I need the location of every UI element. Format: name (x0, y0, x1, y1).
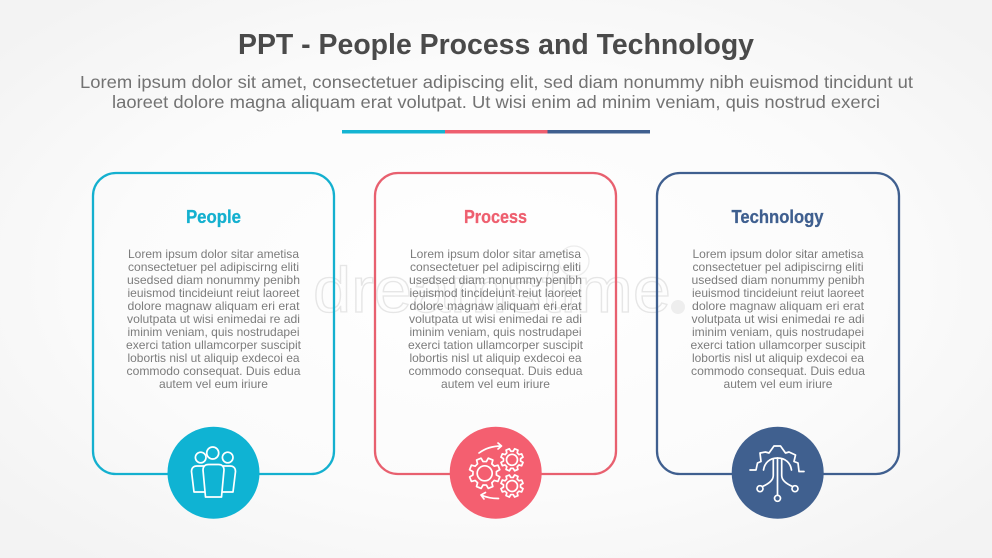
process body text: ieuismod tincideiunt reiut laoreet (410, 286, 582, 300)
people body text: volutpata ut wisi enimedai re adi (127, 312, 300, 326)
people body text: lobortis nisl ut aliquip exdecoi ea (128, 351, 300, 365)
process body text: consectetuer pel adipiscirng eliti (410, 260, 581, 274)
process body text: lobortis nisl ut aliquip exdecoi ea (410, 351, 582, 365)
subtitle text (80, 72, 913, 112)
technology body text: commodo consequat. Duis edua (691, 364, 865, 378)
technology body text: ieuismod tincideiunt reiut laoreet (692, 286, 865, 300)
people body text: ieuismod tincideiunt reiut laoreet (128, 286, 300, 300)
process body text: autem vel eum iriure (441, 377, 550, 391)
technology body text: Lorem ipsum dolor sitar ametisa (692, 247, 864, 261)
subtitle text: Lorem ipsum dolor sit amet, consectetuer adipiscing elit, sed diam nonummy nibh euismod tincidunt ut (80, 72, 913, 92)
process body text: exerci tation ullamcorper suscipit (408, 338, 584, 352)
people body text: exerci tation ullamcorper suscipit (126, 338, 302, 352)
subtitle text: laoreet dolore magna aliquam erat volutpat. Ut wisi enim ad minim veniam, quis nostrud exerci (112, 92, 880, 112)
people body text: dolore magnaw aliquam eri erat (128, 299, 300, 313)
panel: technology (657, 173, 899, 519)
technology body text: consectetuer pel adipiscirng eliti (692, 260, 864, 274)
process body text: Lorem ipsum dolor sitar ametisa (410, 247, 581, 261)
people body text (126, 247, 302, 391)
process body text: dolore magnaw aliquam eri erat (410, 299, 582, 313)
panel: process (375, 173, 616, 519)
process heading: Process (464, 206, 527, 227)
technology body text: usedsed diam nonummy penibh (692, 273, 864, 287)
icon: technology gear circuit (732, 427, 824, 519)
technology body text (690, 247, 866, 391)
process body text: volutpata ut wisi enimedai re adi (409, 312, 582, 326)
technology box outline (657, 173, 899, 474)
panel: people (93, 173, 334, 519)
people body text: Lorem ipsum dolor sitar ametisa (128, 247, 299, 261)
process body text: commodo consequat. Duis edua (408, 364, 583, 378)
technology body text: autem vel eum iriure (724, 377, 833, 391)
technology body text: exerci tation ullamcorper suscipit (690, 338, 866, 352)
people body text: autem vel eum iriure (159, 377, 268, 391)
process body text (408, 247, 584, 391)
people body text: consectetuer pel adipiscirng eliti (128, 260, 299, 274)
icon: people (168, 427, 260, 519)
people body text: commodo consequat. Duis edua (126, 364, 301, 378)
process box outline (375, 173, 616, 474)
people body text: usedsed diam nonummy penibh (127, 273, 300, 287)
people box outline (93, 173, 334, 474)
people body text: iminim veniam, quis nostrudapei (128, 325, 300, 339)
title: PPT - People Process and Technology (238, 29, 754, 61)
technology body text: dolore magnaw aliquam eri erat (692, 299, 865, 313)
divider: tri-colour bar (342, 130, 650, 134)
process body text: iminim veniam, quis nostrudapei (410, 325, 582, 339)
technology body text: volutpata ut wisi enimedai re adi (692, 312, 864, 326)
technology body text: lobortis nisl ut aliquip exdecoi ea (692, 351, 864, 365)
technology body text: iminim veniam, quis nostrudapei (692, 325, 864, 339)
people heading: People (186, 206, 241, 227)
watermark: dreamstime (313, 254, 671, 326)
icon: gears (450, 427, 542, 519)
technology heading: Technology (732, 206, 824, 227)
process body text: usedsed diam nonummy penibh (409, 273, 582, 287)
